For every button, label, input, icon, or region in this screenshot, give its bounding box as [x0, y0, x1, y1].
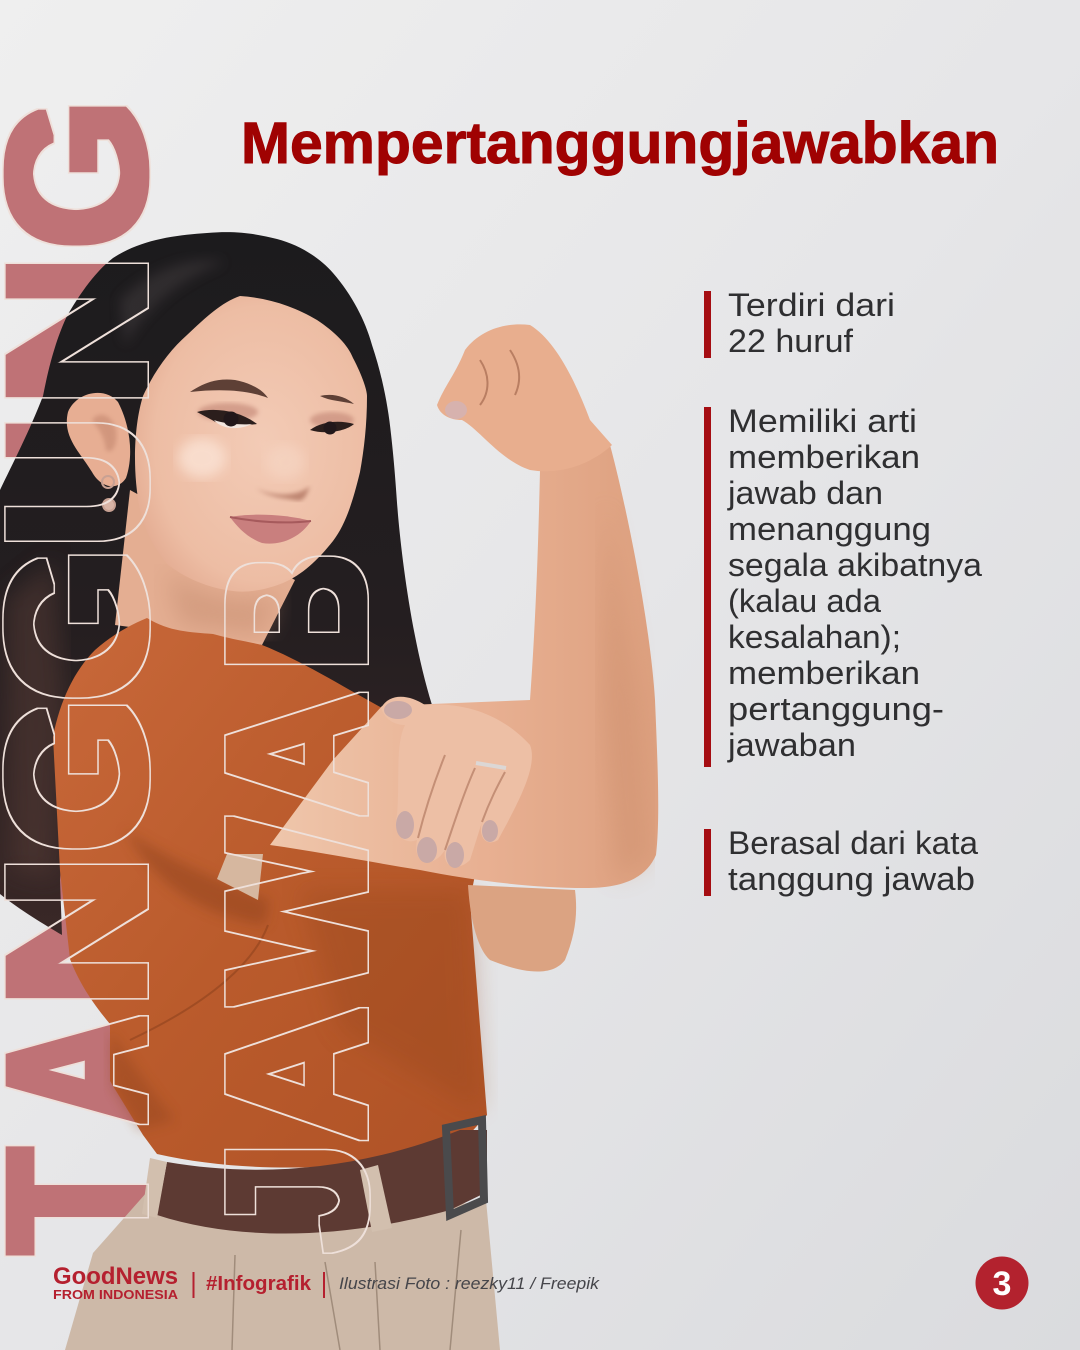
outlined vertical word JAWAB: W — [187, 820, 406, 1003]
outlined vertical word JAWAB: A — [187, 692, 406, 816]
fist nail — [445, 401, 467, 419]
fact: meaning: jawaban — [727, 727, 856, 763]
neck shadow — [165, 570, 280, 635]
ear inner shadow — [92, 415, 116, 451]
pants seams — [232, 1230, 461, 1350]
other forearm — [468, 885, 576, 972]
arm shadow — [600, 500, 650, 880]
outlined vertical word JAWAB: J — [187, 1140, 406, 1252]
fist — [437, 324, 612, 471]
fingernails — [384, 701, 498, 868]
fact: meaning: segala akibatnya — [728, 547, 982, 583]
fact: letter count — [704, 287, 895, 359]
fact: meaning: menanggung — [728, 511, 931, 547]
filled vertical word TANGGUNG — [0, 98, 186, 1254]
belt — [157, 1130, 487, 1234]
finger gaps — [418, 755, 505, 850]
outlined vertical word JAWAB — [187, 553, 406, 1252]
neck — [115, 490, 295, 645]
left eyebrow — [190, 380, 268, 398]
left eyeshadow — [198, 403, 258, 421]
ear — [67, 393, 130, 486]
logo: GoodNews — [53, 1263, 179, 1302]
hair brown ends — [5, 560, 65, 880]
right eyebrow — [320, 395, 354, 404]
pants — [65, 1192, 500, 1350]
fact: meaning — [704, 403, 982, 767]
ring — [476, 763, 506, 768]
fact: meaning: (kalau ada — [728, 583, 881, 619]
fact: meaning: jawab dan — [727, 475, 883, 511]
shirt fold shadows — [125, 830, 270, 925]
shirt body — [53, 618, 490, 1168]
earring — [102, 476, 115, 511]
nose — [256, 486, 310, 501]
fact: letter count: 22 huruf — [728, 323, 853, 359]
photo: woman flexing her arm — [0, 232, 658, 1350]
hair highlights — [120, 260, 225, 345]
page number badge: 3 — [993, 1265, 1011, 1303]
hand on arm — [381, 697, 532, 867]
lips — [230, 515, 311, 544]
hashtag: #Infografik — [206, 1273, 312, 1295]
left eye — [197, 410, 257, 425]
face — [135, 296, 367, 592]
fact: meaning: pertanggung- — [728, 691, 944, 727]
fact: meaning: Memiliki arti — [728, 403, 917, 439]
fact: origin: tanggung jawab — [728, 861, 975, 897]
raised arm — [270, 445, 658, 888]
logo: GoodNews: GoodNews — [53, 1263, 178, 1290]
fact: origin — [704, 825, 978, 897]
right eyeshadow — [310, 412, 354, 428]
fist finger lines — [480, 350, 519, 405]
outlined vertical word TANGGUNG — [0, 98, 186, 1254]
fact: meaning: memberikan — [728, 655, 920, 691]
footer — [53, 1263, 601, 1302]
title: Mempertanggungjawabkan — [241, 111, 999, 176]
right eye — [310, 422, 354, 432]
nose highlight — [265, 444, 305, 480]
fact: origin: Berasal dari kata — [728, 825, 978, 861]
photo credit: Ilustrasi Foto : reezky11 / Freepik — [339, 1274, 601, 1293]
fact: meaning: kesalahan); — [728, 619, 901, 655]
logo: GoodNews: FROM INDONESIA — [53, 1287, 179, 1302]
belt buckle — [446, 1120, 484, 1215]
hair — [0, 232, 432, 935]
belt loops — [142, 1158, 392, 1232]
page number badge — [976, 1256, 1028, 1310]
fact: meaning: memberikan — [728, 439, 920, 475]
outlined vertical word JAWAB: A — [187, 1007, 406, 1141]
outlined vertical word JAWAB: B — [187, 553, 406, 671]
fact: letter count: Terdiri dari — [728, 287, 895, 323]
left cheek glow — [178, 438, 226, 478]
shirt sleeve gap — [217, 854, 263, 900]
shirt diagonal fold — [130, 925, 268, 1040]
